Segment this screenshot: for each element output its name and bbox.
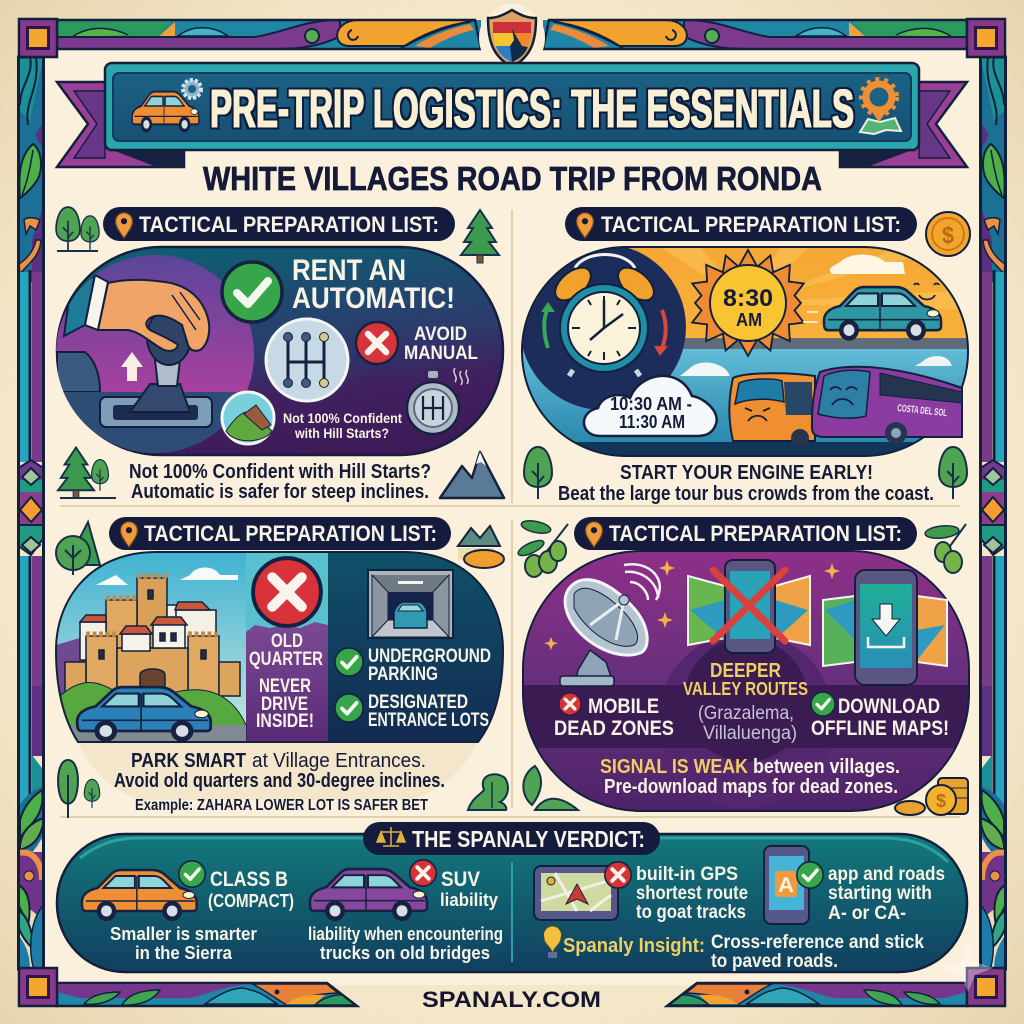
- gps block: built-in GPS: [636, 864, 738, 885]
- insight: Cross-reference and stick: [711, 932, 924, 953]
- ribbon left: [57, 82, 184, 167]
- heading: rent an automatic: RENT AN: [292, 254, 406, 287]
- caption: SIGNAL IS WEAK: [600, 755, 748, 778]
- label: designated entrance lots: [368, 692, 489, 731]
- heading: rent an automatic: [292, 254, 455, 315]
- icon: tree right: [939, 447, 967, 499]
- label: avoid manual: [404, 324, 478, 364]
- icon: gear pin and map: [860, 79, 901, 134]
- icon: sun 8:30 am: 8:30: [723, 285, 773, 312]
- corner top-right: [967, 19, 1005, 57]
- gps block: to goat tracks: [636, 902, 746, 923]
- class b car block: CLASS B: [210, 868, 288, 891]
- icon: trees top-left: [56, 207, 99, 251]
- icon: satellite dish: [560, 564, 660, 686]
- panel: the spanaly verdict: [57, 822, 967, 972]
- icon: mountain and coin: [458, 526, 504, 568]
- cloud with time range: 11:30 AM: [619, 412, 685, 432]
- panel: start your engine early: [520, 207, 970, 505]
- icon: olive branch left: [516, 519, 568, 577]
- bottom border left: [57, 983, 357, 1006]
- old quarter warning: DRIVE: [261, 694, 308, 715]
- icon: smiling car: [803, 284, 941, 341]
- illustration pill: [56, 247, 503, 455]
- caption: Avoid old quarters and 30-degree inclines.: [114, 769, 445, 792]
- app block: A- or CA-: [828, 903, 906, 924]
- label: mobile dead zones: [554, 695, 674, 740]
- corner bottom-right: [967, 968, 1005, 1006]
- icon: cross: [356, 322, 398, 364]
- caption: [600, 755, 900, 798]
- label: avoid manual: AVOID: [414, 324, 467, 345]
- ribbon right: [840, 82, 967, 167]
- caption: START YOUR ENGINE EARLY!: [620, 461, 873, 484]
- class b car block: Smaller is smarter: [110, 923, 257, 944]
- caption: [114, 749, 445, 814]
- old quarter warning: INSIDE!: [256, 711, 314, 732]
- icon: blue car: [77, 687, 211, 742]
- icon: check underground: [335, 648, 363, 676]
- icon: leaf bottom-left: [523, 766, 578, 810]
- icon: alarm clock: [541, 254, 668, 376]
- caption: at Village Entrances.: [252, 749, 426, 772]
- label: underground parking: [368, 646, 491, 685]
- label: underground parking: UNDERGROUND: [368, 646, 491, 667]
- banner plate: [105, 63, 919, 150]
- insight: to paved roads.: [711, 951, 838, 972]
- label: underground parking: PARKING: [368, 664, 438, 685]
- icon: pine top-right: [461, 210, 499, 263]
- icon: bush bottom-right: [468, 774, 508, 810]
- icon: check entrance: [335, 694, 363, 722]
- deeper valley routes: DEEPER: [710, 660, 781, 682]
- caption: [129, 460, 431, 503]
- icon: trees bottom-left: [58, 760, 100, 818]
- heading pill: TACTICAL PREPARATION LIST:: [601, 212, 901, 237]
- old quarter warning: OLD: [271, 631, 303, 652]
- icon: stopwatch: [407, 368, 468, 434]
- panel: rent an automatic: [56, 207, 504, 503]
- heading: rent an automatic: AUTOMATIC!: [292, 282, 455, 315]
- heading pill: [103, 207, 455, 241]
- panel: park smart: [56, 517, 508, 818]
- deeper valley routes: (Grazalema,: [698, 703, 794, 724]
- icon: purple bus: [812, 367, 962, 444]
- icon: large cross: [253, 558, 321, 626]
- icon: crossed out phone and maps: [688, 560, 810, 653]
- dividers: [60, 210, 960, 817]
- old quarter warning: QUARTER: [249, 649, 323, 670]
- hill-start note: with Hill Starts?: [294, 425, 389, 441]
- suv block: SUV: [441, 868, 480, 891]
- illustration pill: [523, 551, 969, 811]
- caption: Pre-download maps for dead zones.: [604, 775, 898, 798]
- label: mobile dead zones: MOBILE: [588, 695, 659, 718]
- caption background: [78, 742, 478, 800]
- castle: [65, 576, 240, 698]
- label: designated entrance lots: ENTRANCE LOTS: [368, 710, 489, 731]
- icon: orange car: [132, 80, 201, 132]
- bottom border right: [667, 983, 967, 1006]
- right border band: [980, 57, 1006, 970]
- sparkle: [943, 945, 993, 992]
- deeper valley routes: Villaluenga): [703, 723, 797, 744]
- caption: between villages.: [753, 755, 900, 778]
- class b car block: [82, 861, 294, 963]
- icon: sun 8:30 am: AM: [736, 310, 762, 330]
- hand on gear stick: [56, 255, 254, 454]
- label: designated entrance lots: DESIGNATED: [368, 692, 468, 713]
- caption: Example: ZAHARA LOWER LOT IS SAFER BET: [135, 797, 428, 814]
- top border left: [57, 20, 481, 50]
- icon: tree left: [524, 447, 552, 499]
- suv block: trucks on old bridges: [320, 942, 490, 963]
- icon: coin stacks: $: [936, 791, 946, 811]
- heading pill: [565, 207, 917, 241]
- suv block: [308, 860, 503, 963]
- label: mobile dead zones: DEAD ZONES: [554, 717, 674, 740]
- icon: check: [222, 262, 282, 322]
- icon: purple bus: COSTA DEL SOL: [897, 403, 948, 419]
- heading pill: TACTICAL PREPARATION LIST:: [144, 521, 437, 546]
- suv block: liability when encountering: [308, 923, 503, 944]
- cloud with time range: 10:30 AM -: [610, 394, 692, 414]
- class b car block: in the Sierra: [135, 942, 233, 963]
- icon: cross small: [559, 693, 581, 715]
- icon: crest shield: [479, 4, 545, 72]
- dark clock circle: [520, 244, 686, 410]
- illustration pill: [520, 244, 968, 456]
- gps block: [534, 862, 748, 923]
- banner inner: [113, 73, 911, 141]
- app block: starting with: [828, 883, 932, 904]
- left border band: [18, 57, 44, 970]
- insight: Spanaly Insight:: [563, 935, 705, 957]
- title banner: [57, 63, 967, 167]
- corner bottom-left: [19, 968, 57, 1006]
- old quarter warning: [249, 631, 323, 732]
- heading pill: THE SPANALY VERDICT:: [412, 826, 645, 852]
- heading pill: TACTICAL PREPARATION LIST:: [609, 521, 902, 546]
- sparkles: [544, 560, 840, 650]
- icon: check small: [811, 692, 835, 716]
- icon: trees bottom-left: [58, 448, 116, 498]
- gps block: shortest route: [636, 883, 748, 904]
- app block: A: [778, 874, 794, 897]
- app block: [764, 846, 945, 924]
- icon: manual shifter: [266, 319, 348, 401]
- suv block: liability: [440, 889, 499, 910]
- heading pill: [574, 517, 917, 550]
- class b car block: (COMPACT): [208, 891, 294, 911]
- icon: coin: $: [942, 222, 955, 249]
- icon: mountains: [440, 452, 504, 498]
- heading pill: [109, 517, 451, 550]
- caption: Automatic is safer for steep inclines.: [131, 480, 429, 503]
- hill-start note: Not 100% Confident: [283, 410, 402, 426]
- icon: orange bus: [729, 373, 815, 447]
- verdict background: [57, 834, 967, 972]
- corner top-left: [19, 19, 57, 57]
- footer: SPANALY.COM: [422, 987, 601, 1012]
- cloud with time range: [584, 376, 717, 436]
- heading pill: [363, 822, 660, 855]
- deeper valley routes: VALLEY ROUTES: [683, 679, 808, 699]
- panel: dead zones: [57, 517, 993, 1012]
- icon: olive branch right: [924, 524, 966, 573]
- divider: [511, 862, 513, 962]
- icon: trees top-left: [56, 522, 100, 575]
- top border right: [543, 20, 967, 50]
- illustration pill: [56, 552, 504, 742]
- label: download offline maps: DOWNLOAD: [838, 695, 940, 718]
- caption: Beat the large tour bus crowds from the coast.: [558, 482, 934, 505]
- app block: app and roads: [828, 864, 945, 885]
- deeper valley routes: [683, 660, 808, 744]
- heading pill: TACTICAL PREPARATION LIST:: [139, 212, 439, 237]
- icon: hill: [222, 392, 274, 444]
- label: avoid manual: MANUAL: [404, 343, 478, 364]
- label: download offline maps: [811, 695, 949, 740]
- icon: underground garage: [368, 570, 453, 638]
- icon: coin stacks: [895, 778, 968, 815]
- caption: PARK SMART: [131, 749, 246, 772]
- icon: sun 8:30 am: [692, 250, 804, 356]
- insight: [544, 926, 924, 972]
- hill-start note: [283, 410, 402, 441]
- label: download offline maps: OFFLINE MAPS!: [811, 717, 949, 740]
- icon: phone with offline map: [823, 570, 947, 685]
- old quarter warning: NEVER: [259, 676, 311, 697]
- icon: coin: [926, 212, 970, 256]
- caption: [558, 461, 934, 505]
- caption: Not 100% Confident with Hill Starts?: [129, 460, 431, 483]
- subtitle: WHITE VILLAGES ROAD TRIP FROM RONDA: [203, 160, 822, 197]
